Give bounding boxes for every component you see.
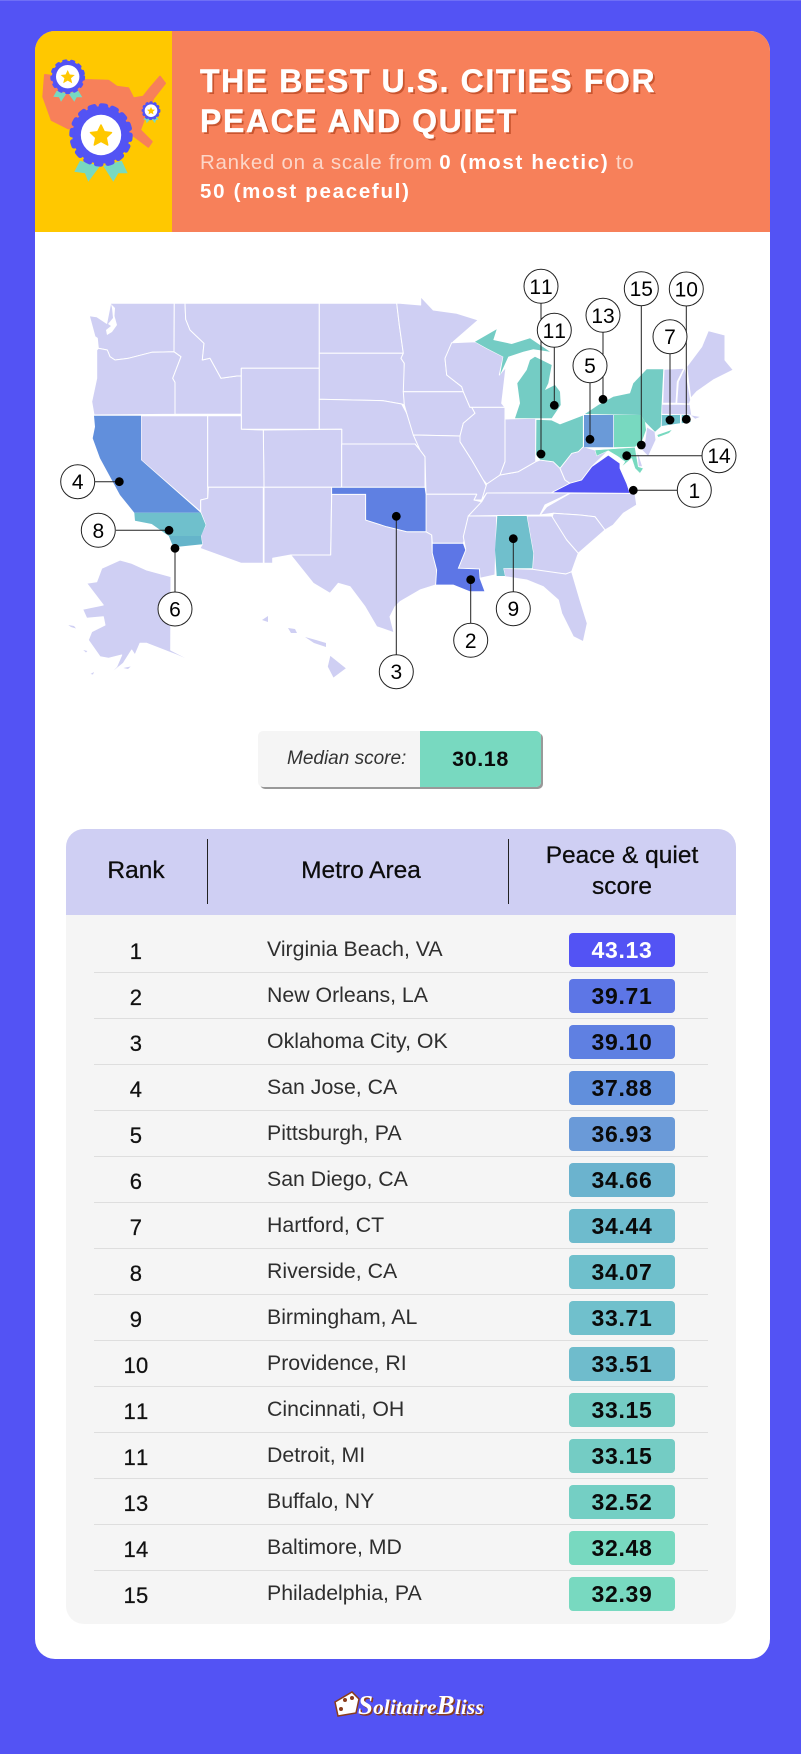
row 6: 34.66 [591,1167,653,1193]
row 3 [94,1025,708,1065]
row 14: Baltimore, MD [267,1535,402,1559]
row 2: 39.71 [591,983,653,1009]
callout 11 Detroit: 11 [543,320,566,343]
subtitle: 50 (most peaceful) [200,180,411,202]
callout 8: 8 [92,520,104,543]
row 9: 9 [130,1307,142,1332]
row 7: Hartford, CT [267,1213,384,1237]
row 15: 32.39 [591,1581,653,1607]
header banner [35,31,770,232]
callout 3: 3 [390,661,402,684]
row 10 [94,1347,708,1387]
row 1: 43.13 [591,937,653,963]
row 8: 34.07 [591,1259,653,1285]
row 4 [94,1071,708,1111]
row 1 [94,933,708,973]
row 14 [94,1531,708,1571]
row 8: 8 [130,1261,142,1286]
table header [66,829,736,915]
callout 10 [669,272,703,424]
callout 7: 7 [664,326,676,349]
median value [420,731,541,787]
callout 11 Cincinnati [524,269,558,458]
subtitle: Ranked on a scale from 0 (most hectic) to [200,150,634,174]
title [200,63,656,140]
callout 1: 1 [688,480,700,503]
row 5: 5 [130,1123,142,1148]
row 11 Cincinnati: 11 [123,1399,149,1424]
row 15 [123,1577,675,1611]
column heading: score [546,842,698,900]
yellow icon panel [35,31,172,232]
row 7: 7 [130,1215,142,1240]
state: Louisiana (rank 2) [432,543,485,592]
decorative bay and sound cut-outs [106,304,117,335]
callout 1 [629,473,711,507]
callout 9: 9 [507,598,519,621]
row 11 Detroit: Detroit, MI [267,1443,365,1467]
column heading: metro area: Metro Area [301,857,421,884]
logo: wordmark: SolitaireBliss [358,1690,484,1720]
row 14: 32.48 [591,1535,653,1561]
row 7: 34.44 [591,1213,653,1239]
row 5 [94,1117,708,1157]
state: Oklahoma (rank 3) [332,487,426,532]
state: Ohio [536,415,583,468]
row 13: Buffalo, NY [267,1489,374,1513]
median score box [258,731,541,787]
row 2: 2 [130,985,142,1010]
column heading: score: Peace & quiet [546,842,698,869]
row 11 Cincinnati: Cincinnati, OH [267,1397,404,1421]
row 11 Cincinnati: 33.15 [591,1397,653,1423]
callout 5 [573,349,607,444]
icon: small medal right [142,102,160,123]
column heading: score: score [592,873,652,900]
row 14: 14 [123,1537,149,1562]
state: Long Island [657,430,672,437]
row 2: New Orleans, LA [267,983,428,1007]
callout 15 [624,272,658,449]
row 6: 6 [130,1169,142,1194]
header divider [207,839,208,904]
row 9 [94,1301,708,1341]
state: Pennsylvania [584,415,646,447]
callout 5: 5 [584,355,596,378]
state: Alabama [495,516,533,576]
row 9: Birmingham, AL [267,1305,417,1329]
row 2 [94,979,708,1019]
callout 2 [454,575,488,657]
row 15: Philadelphia, PA [267,1581,422,1605]
callout 14: 14 [707,445,731,468]
callout 10: 10 [675,278,698,302]
row 11 Detroit: 33.15 [591,1443,653,1469]
subtitle [200,150,634,202]
row 11 Detroit: 11 [123,1445,149,1470]
state: Rhode Island [682,415,691,423]
ranking table [66,829,736,1624]
row 11 Detroit [94,1439,708,1479]
row 10: 33.51 [591,1351,653,1377]
callout 4: 4 [72,471,84,494]
icon: orange US silhouette [43,75,165,147]
callout 13 [586,298,620,404]
callout 6: 6 [169,598,181,622]
row 13: 13 [123,1491,149,1516]
icon: small medal left [52,61,84,102]
map of U.S. states with callouts [60,268,736,690]
callout 4 [61,465,124,499]
icon: US map with award medals [42,59,166,182]
state: Michigan [475,329,561,418]
top highlight line [0,0,801,1]
row 15: 15 [123,1583,149,1608]
header divider [508,839,509,904]
row 13: 32.52 [591,1489,653,1515]
brand logo [334,1690,484,1720]
row 3: 3 [130,1031,142,1056]
row 7 [94,1209,708,1249]
row 4: 4 [130,1077,142,1102]
row 4: San Jose, CA [267,1075,397,1099]
row 4: 37.88 [591,1075,653,1101]
row 6: San Diego, CA [267,1167,408,1191]
row 5: Pittsburgh, PA [267,1121,402,1145]
state: California [93,416,206,547]
row 8 [94,1255,708,1295]
state: Maryland [595,447,643,473]
row 10: 10 [123,1353,149,1378]
median value: 30.18 [452,747,509,771]
callout 15: 15 [630,278,653,301]
state: New York [585,369,663,432]
callout 6 [158,544,192,626]
callout 9 [496,534,530,626]
row 3: 39.10 [591,1029,653,1055]
column heading: rank: Rank [107,857,165,884]
row 9: 33.71 [591,1305,653,1331]
callout 14 [622,439,736,473]
logo: cards icon [334,1691,360,1717]
row 13 [94,1485,708,1525]
callout 2: 2 [465,630,477,653]
row 8: Riverside, CA [267,1259,397,1283]
callout 8 [81,513,173,547]
callout 11 Detroit [537,313,571,410]
callout 11 Cincinnati: 11 [529,276,553,299]
row 11 Cincinnati [94,1393,708,1433]
row 3: Oklahoma City, OK [267,1029,448,1053]
map: non-ranked states [68,297,733,682]
row 6 [94,1163,708,1203]
state: Virginia (rank 1) [552,455,630,493]
row 10: Providence, RI [267,1351,407,1375]
median label: Median score: [287,748,406,769]
state: Connecticut [662,415,680,426]
title: THE BEST U.S. CITIES FOR [200,63,656,99]
row 1: 1 [130,939,142,964]
callout 7 [653,320,687,424]
title: PEACE AND QUIET [200,103,518,139]
row 1: Virginia Beach, VA [267,937,443,961]
callout 3 [379,512,413,689]
icon: large medal [72,106,130,182]
callout 13: 13 [591,305,615,328]
row 5: 36.93 [591,1121,653,1147]
